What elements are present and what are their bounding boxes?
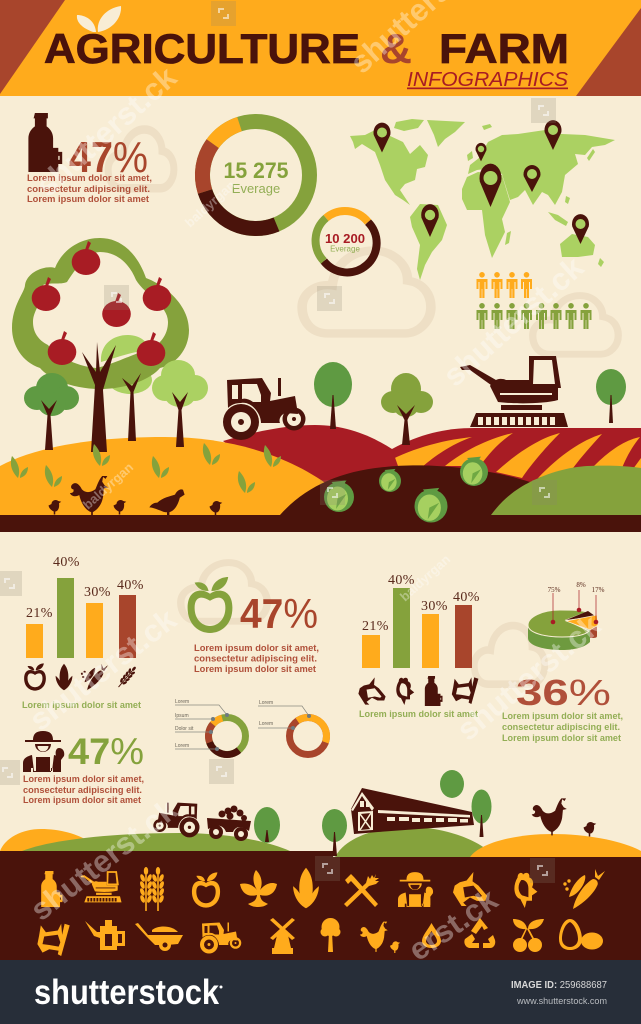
stat: farmer 47%: [23, 731, 144, 806]
text block: Lorem ipsum dolor sit amet: [502, 733, 622, 744]
bar chart: crops: Lorem ipsum dolor sit amet: [22, 700, 142, 711]
title: [44, 25, 569, 72]
hills: [0, 827, 641, 857]
stat: apple 47%: [188, 577, 319, 675]
text block: Lorem ipsum dolor sit amet,: [23, 774, 144, 785]
trees: [254, 770, 492, 856]
watermarks: erst.ck: [402, 881, 505, 968]
text block: [194, 643, 319, 675]
icon row two: [37, 918, 603, 956]
pie chart: 17%: [592, 586, 605, 594]
header banner: [0, 0, 641, 96]
small donut chart with callouts: four segments: Lorem: [175, 699, 189, 705]
donut chart: 15 275: 15 275: [224, 158, 288, 183]
pie chart: 8%: [576, 581, 586, 589]
farm landscape: [0, 238, 641, 532]
bar chart: livestock: [358, 573, 480, 720]
field: striped red hill: [370, 428, 641, 515]
icon: tractor with trailer: [153, 803, 251, 841]
watermarks: shutterst.ck: [23, 601, 183, 738]
small trees: [24, 360, 626, 450]
donut chart: 10 200: 10 200: [325, 231, 365, 246]
text block: [27, 173, 152, 205]
percentage: 47%: [240, 590, 318, 637]
poultry silhouettes: [48, 476, 222, 517]
text block: [23, 774, 144, 806]
text block: consectetur adipiscing elit.: [194, 654, 317, 664]
image id: IMAGE ID: 259688687: [511, 979, 607, 991]
crop icons: [24, 663, 139, 691]
watermarks: shutterst.ck: [29, 59, 184, 203]
percentage: 47%: [69, 133, 148, 182]
small donut chart with callouts: two segments: [258, 700, 327, 754]
donut chart: 10 200: Everage: [330, 244, 360, 254]
icon: farmer: [23, 731, 64, 772]
pie chart: [528, 581, 605, 650]
bar chart: livestock: 30%: [421, 599, 448, 614]
world map: [350, 119, 615, 280]
text block: consectetur adipiscing elit.: [27, 184, 150, 195]
watermark tiles: [0, 1, 557, 883]
red hill: [223, 425, 410, 500]
text block: Lorem ipsum dolor sit amet,: [502, 711, 623, 722]
text block: Lorem ipsum dolor sit amet: [23, 795, 142, 806]
bar chart: crops: 40%: [53, 555, 80, 570]
text block: Lorem ipsum dolor sit amet: [27, 194, 150, 205]
yellow hill: [0, 437, 335, 515]
icon row one: [41, 867, 605, 911]
small donut chart with callouts: four segments: [175, 699, 246, 755]
background clouds upper: [108, 130, 618, 354]
icon: rooster: [532, 798, 567, 835]
green hill: [491, 466, 641, 515]
footer bar: [0, 960, 641, 1024]
bottom landscape: [0, 770, 641, 857]
icon: milk bottle: [28, 113, 62, 172]
watermarks: baldyrgan: [397, 551, 453, 604]
icon: chick: [584, 822, 596, 836]
background clouds lower: [181, 563, 545, 684]
title: &: [380, 25, 412, 72]
ground band: [0, 515, 641, 532]
title: AGRICULTURE: [44, 25, 360, 72]
bar chart: livestock: 40%: [388, 573, 415, 588]
tree with apples: [12, 238, 189, 452]
stat: 36%: [502, 672, 623, 744]
text block: Lorem ipsum dolor sit amet: [194, 664, 317, 675]
donut chart: 15 275: Everage: [232, 181, 280, 196]
bar chart: livestock: Lorem ipsum dolor sit amet: [359, 709, 479, 720]
apples: [32, 241, 171, 366]
donut chart: 15 275: [202, 122, 310, 229]
text block: Lorem ipsum dolor sit amet,: [194, 643, 319, 654]
text block: Lorem ipsum dolor sit amet,: [27, 173, 152, 184]
map pins: [374, 120, 589, 244]
subtitle: INFOGRAPHICS: [407, 69, 569, 91]
stat: 36%: 36 %: [516, 672, 611, 713]
people pictograms: [476, 272, 592, 329]
text block: [502, 711, 623, 744]
text block: consectetur adipiscing elit.: [502, 722, 620, 733]
bar chart: crops: 30%: [84, 585, 111, 600]
icon: header leaves: [77, 6, 121, 32]
tree trunk: [82, 342, 116, 452]
pie chart: 75%: [548, 586, 561, 594]
icon: combine harvester: [460, 356, 568, 427]
small donut chart with callouts: four segments: Lorem: [175, 743, 189, 749]
watermarks: baldyrgan: [80, 459, 136, 512]
small donut chart with callouts: two segments: Lorem: [259, 721, 273, 727]
watermarks: shutterst.ck: [450, 607, 608, 747]
icon: apple: [188, 577, 232, 633]
cabbages: [324, 457, 488, 522]
footer logo: shutterstock: [34, 973, 219, 1012]
text block: consectetur adipiscing elit.: [23, 785, 142, 796]
donut chart: 10 200: [316, 211, 377, 272]
barn: [351, 788, 474, 834]
website: www.shutterstock.com: [516, 996, 607, 1007]
watermarks: baldyrgan: [182, 177, 238, 230]
small donut chart with callouts: two segments: Lorem: [259, 700, 273, 706]
seedlings: [11, 443, 281, 493]
small donut chart with callouts: four segments: Dolor sit: [175, 726, 194, 732]
livestock icons: [358, 676, 478, 706]
small donut chart with callouts: four segments: Ipsum: [175, 713, 189, 719]
bar chart: crops: 21%: [26, 606, 53, 621]
watermarks: shutterst.ck: [436, 249, 591, 393]
bar chart: livestock: 40%: [453, 590, 480, 605]
percentage: 47%: [68, 731, 144, 772]
dark hill: [280, 465, 560, 515]
bar chart: crops: 40%: [117, 578, 144, 593]
stat: milk 47%: [27, 113, 152, 205]
watermarks: shutterst.ck: [24, 791, 184, 928]
bar chart: livestock: 21%: [362, 619, 389, 634]
icon: tractor: [223, 378, 306, 440]
title: FARM: [439, 25, 569, 72]
registered mark: [220, 986, 222, 988]
icon band: [0, 851, 641, 960]
bar chart: crops: [22, 555, 144, 711]
